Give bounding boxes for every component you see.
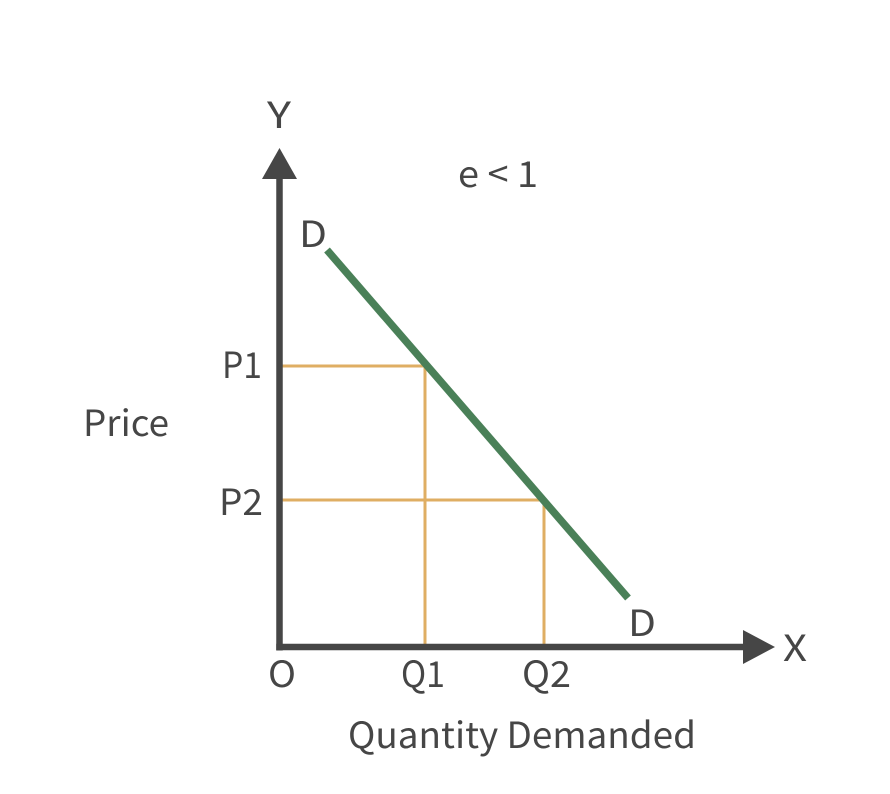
label: Y: Y bbox=[266, 87, 292, 139]
demand line bbox=[327, 250, 628, 598]
guide lines bbox=[280, 366, 544, 647]
label: X: X bbox=[783, 620, 807, 672]
label: Price: Price bbox=[83, 395, 169, 447]
label: elasticity: e < 1 bbox=[458, 146, 538, 198]
label: D bottom: D bbox=[628, 595, 656, 647]
x axis with arrow bbox=[276, 630, 775, 664]
label: O: O bbox=[268, 646, 296, 698]
label: P1: P1 bbox=[222, 337, 262, 389]
y axis with arrow bbox=[262, 148, 297, 650]
label: D top: D bbox=[299, 206, 327, 258]
label: Q2: Q2 bbox=[522, 646, 571, 698]
label: Quantity Demanded: Quantity Demanded bbox=[348, 707, 696, 759]
label: P2: P2 bbox=[219, 474, 263, 526]
label: Q1: Q1 bbox=[401, 646, 445, 698]
